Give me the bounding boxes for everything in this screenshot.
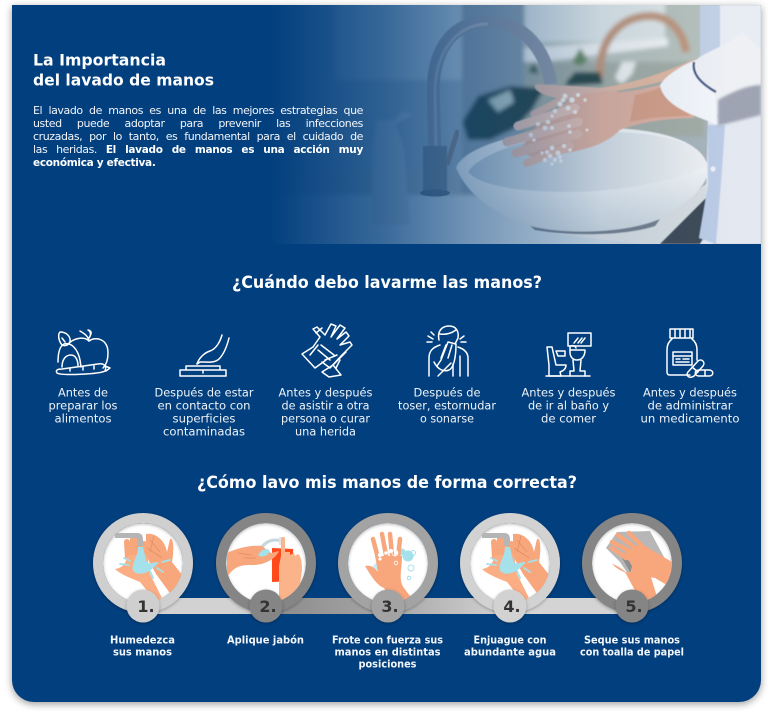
title: La Importancia — [33, 50, 166, 70]
label: bano — [522, 386, 616, 426]
icon: surface touch — [180, 335, 229, 376]
label: bano: Antes y después — [522, 386, 616, 400]
label: step 3: manos en distintas — [334, 646, 440, 658]
step 2 — [221, 518, 311, 622]
title — [33, 50, 214, 90]
label: herida: persona o curar — [281, 412, 370, 426]
connector bar — [143, 598, 632, 614]
illustration: rubbing hands — [365, 534, 416, 606]
label: step 5: Seque sus manos — [584, 634, 680, 646]
label: step 4 — [464, 634, 556, 658]
heading: como: ¿Cómo lavo mis manos de forma correcta? — [197, 473, 577, 492]
label: superficies: Después de estar — [154, 386, 254, 400]
label: superficies — [154, 386, 254, 438]
label: step 4: Enjuague con — [474, 634, 546, 646]
label: alimentos: alimentos — [54, 412, 112, 426]
label: toser: toser, estornudar — [398, 398, 496, 412]
label: medicamento: de administrar — [648, 398, 733, 412]
label: step 3 — [332, 634, 443, 670]
label: step 1 — [110, 634, 175, 658]
intro paragraph: las heridas. El lavado de manos es una acción muy — [33, 143, 363, 156]
label: medicamento: Antes y después — [643, 386, 737, 400]
step 3: 3. — [381, 597, 399, 616]
illustration: drying with towel — [606, 531, 672, 600]
icon: food — [56, 330, 110, 374]
step 4 — [465, 518, 555, 622]
icon: medicine bottle — [667, 329, 713, 377]
icon: bathroom — [546, 333, 591, 376]
label: step 5: con toalla de papel — [580, 646, 684, 658]
intro paragraph: cruzadas, por lo tanto, es fundamental para el cuidado de — [33, 130, 363, 143]
step 4: 4. — [503, 597, 521, 616]
icon: sneezing person — [427, 326, 468, 376]
label: herida — [278, 386, 372, 438]
label: alimentos: preparar los — [48, 398, 118, 412]
photo: washing hands at sink — [286, 5, 761, 244]
label: bano: de comer — [541, 412, 596, 426]
step 1: 1. — [137, 597, 155, 616]
label: step 5 — [580, 634, 684, 658]
shirt — [716, 5, 761, 115]
soap foam — [529, 93, 588, 166]
label: superficies: contaminadas — [163, 424, 245, 438]
label: step 1: Humedezca — [110, 634, 175, 646]
intro paragraph — [33, 104, 364, 169]
illustration: hands under water — [115, 533, 186, 602]
label: herida: una herida — [295, 424, 356, 438]
label: superficies: en contacto con — [158, 398, 250, 412]
intro paragraph: usted puede adoptar para prevenir las infecciones — [33, 117, 363, 130]
far arm — [600, 59, 700, 92]
label: alimentos — [48, 386, 118, 426]
label: toser: Después de — [414, 386, 480, 400]
label: superficies: superficies — [172, 412, 236, 426]
heading: cuando: ¿Cuándo debo lavarme las manos? — [232, 273, 542, 292]
illustration: rinsing hands — [482, 533, 553, 602]
label: step 1: sus manos — [113, 646, 172, 658]
label: bano: de ir al baño y — [528, 398, 609, 412]
label: toser — [398, 386, 496, 426]
label: step 3: posiciones — [358, 658, 416, 670]
step 1 — [98, 518, 188, 622]
intro paragraph: El lavado de manos es una de las mejores estrategias que — [33, 104, 363, 117]
intro paragraph: económica y efectiva. — [33, 157, 156, 169]
label: alimentos: Antes de — [58, 386, 108, 400]
illustration: applying soap — [227, 537, 302, 600]
step 5: 5. — [625, 597, 643, 616]
label: herida: de asistir a otra — [282, 398, 370, 412]
label: medicamento: un medicamento — [640, 412, 740, 426]
title: del lavado de manos — [33, 70, 214, 90]
step 3 — [343, 518, 433, 622]
label: step 3: Frote con fuerza sus — [332, 634, 443, 646]
label: step 4: abundante agua — [464, 646, 556, 658]
label: herida: Antes y después — [278, 386, 372, 400]
step 2: 2. — [259, 597, 277, 616]
label: toser: o sonarse — [420, 412, 474, 426]
icon: bandaged hand — [302, 324, 352, 377]
near hand and arm — [520, 84, 695, 157]
label: step 2: Aplique jabón — [227, 634, 304, 646]
label: medicamento — [640, 386, 740, 426]
step 5 — [587, 518, 677, 622]
